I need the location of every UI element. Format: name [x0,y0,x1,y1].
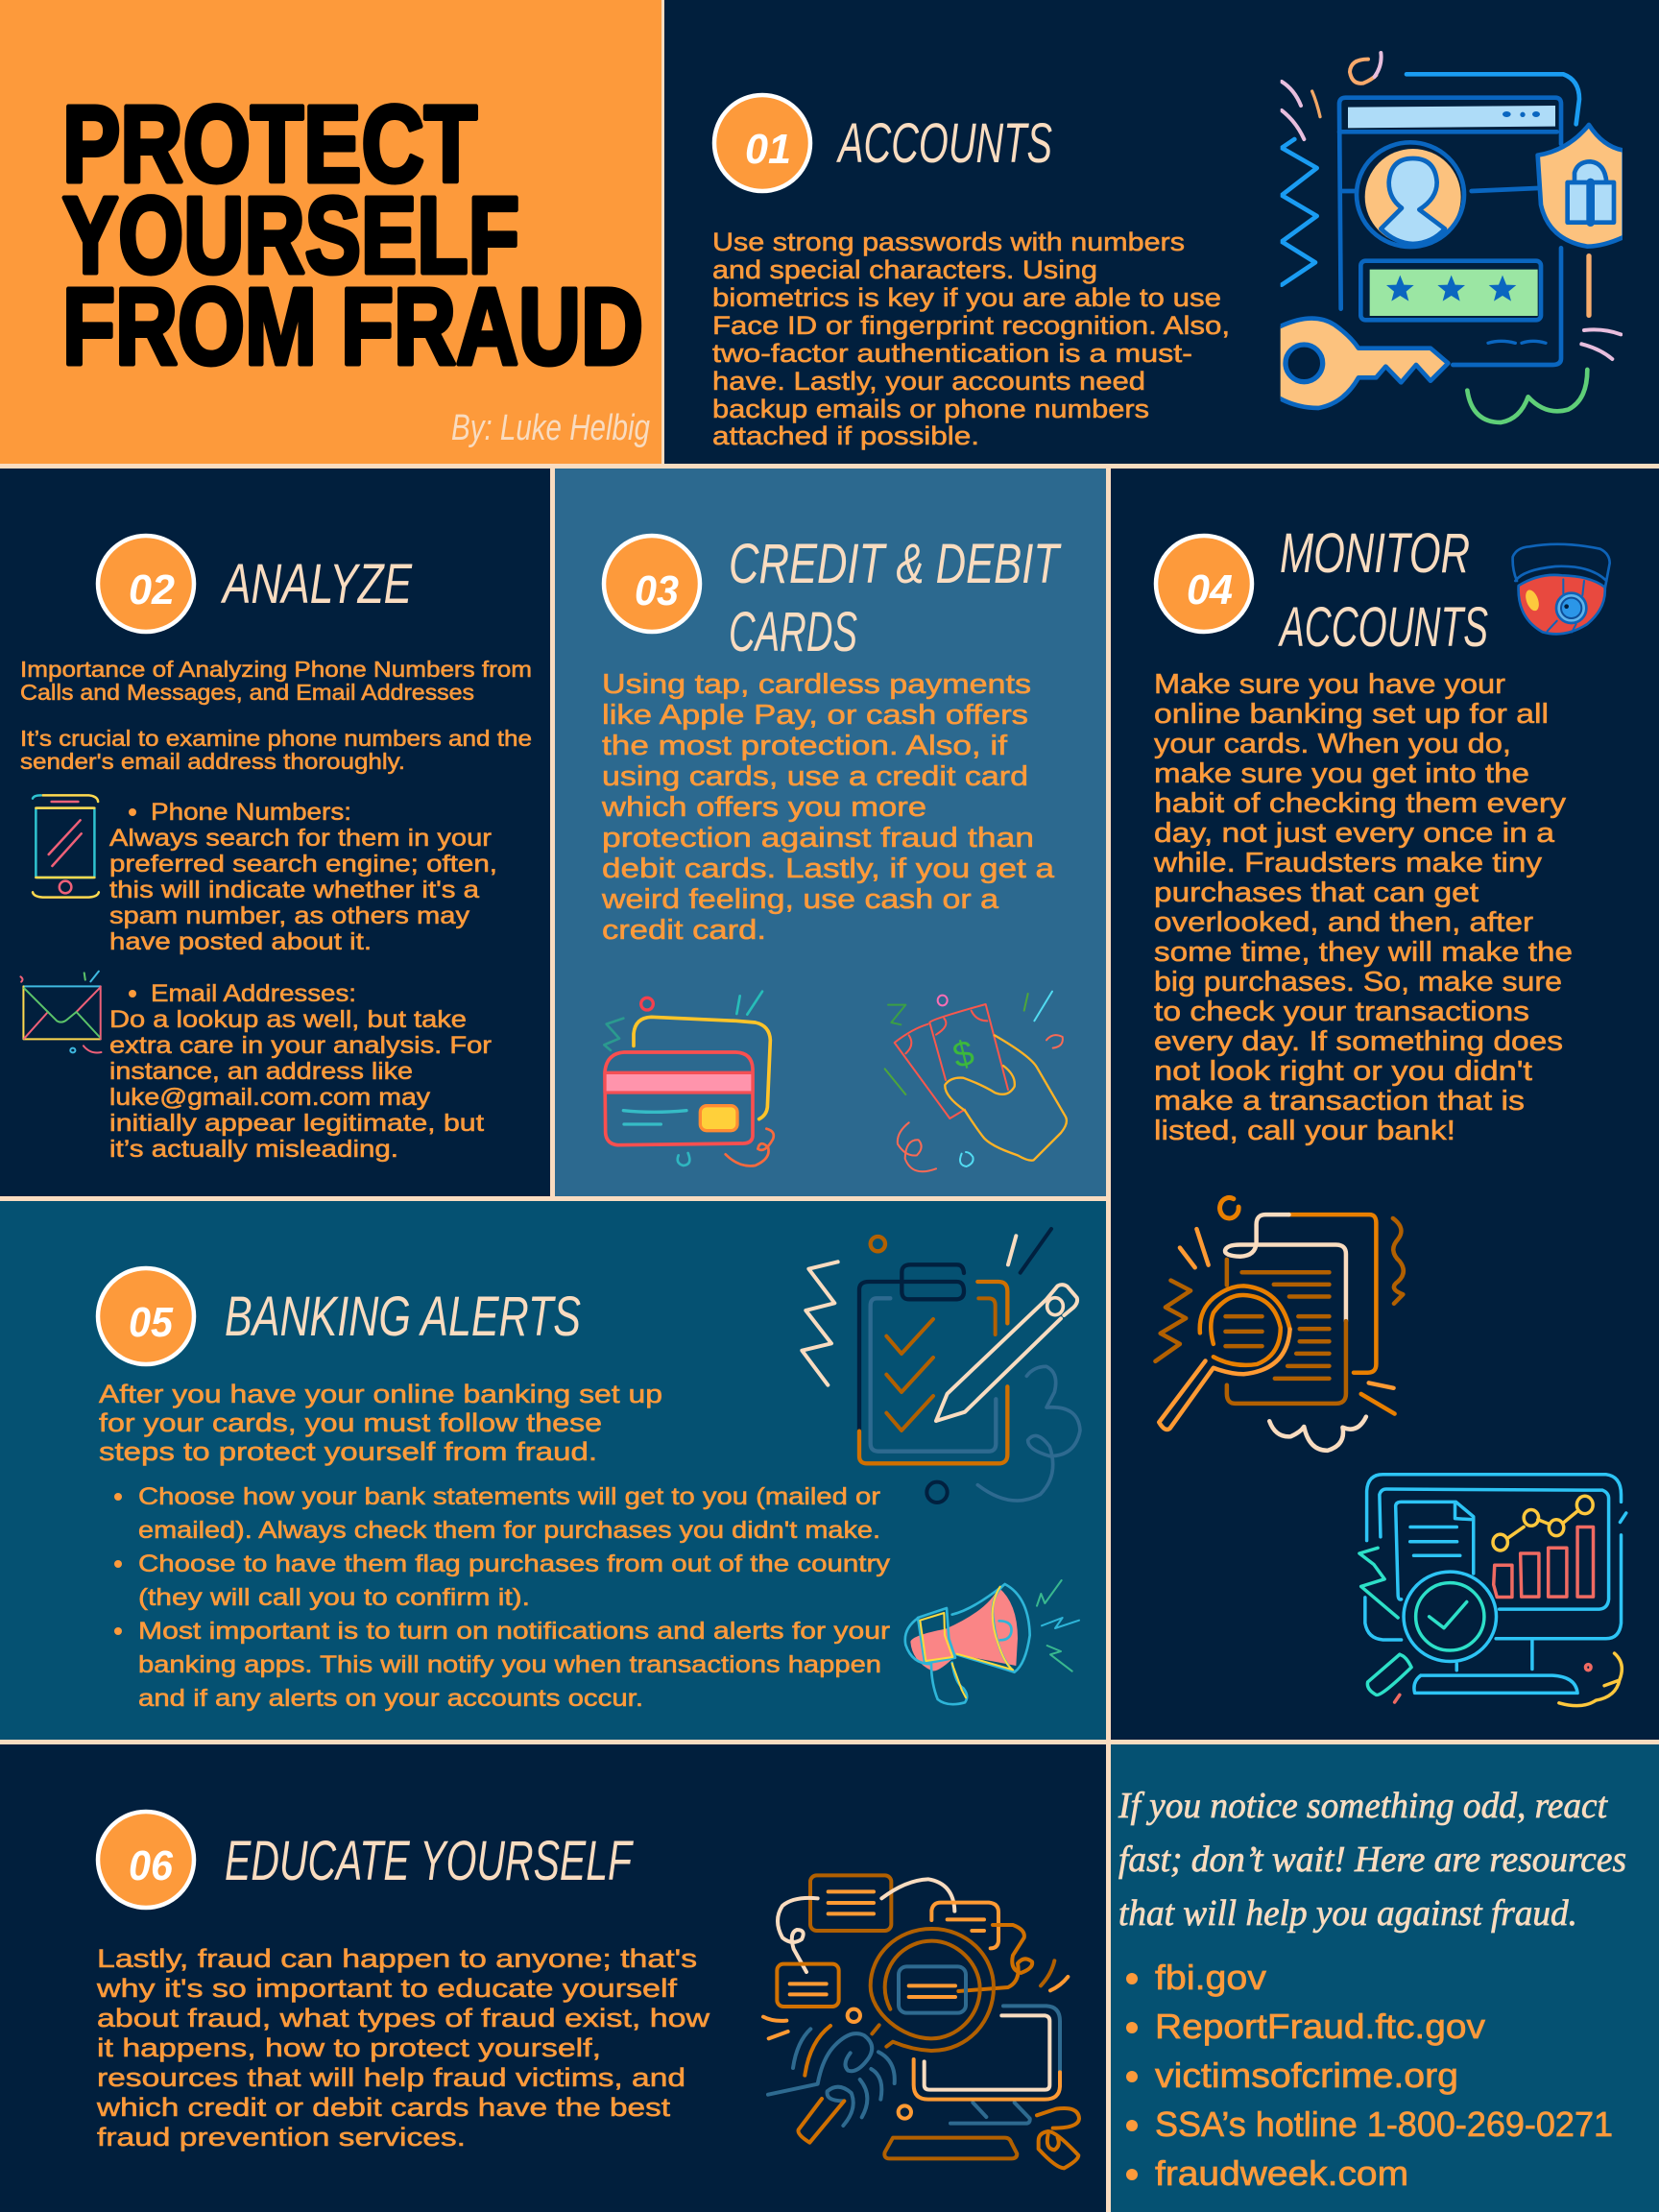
text block: monitor accounts: big purchases. So, make sure [1154,967,1562,998]
heading: credit and debit cards [729,533,1062,663]
text block: email addresses: Do a lookup as well, but take [109,1006,467,1033]
text block: monitor accounts: make sure you get into the [1154,758,1529,789]
list: fraud resources: ReportFraud.ftc.gov [1155,2007,1485,2046]
text block: cards: which offers you more [601,792,926,823]
text block: banking intro: steps to protect yourself from fraud. [99,1437,597,1466]
text block: banking intro: for your cards, you must follow these [99,1408,602,1437]
panel: 02 analyze [0,469,550,1196]
callout: react fast: If you notice something odd, react [1118,1786,1608,1826]
text block: accounts: attached if possible. [712,421,979,450]
title [62,84,643,387]
text block: monitor accounts: while. Fraudsters make tiny [1153,848,1543,878]
heading: monitor accounts [1278,522,1488,659]
text block: monitor accounts: make a transaction that is [1154,1086,1525,1117]
icon: security camera [1513,544,1610,634]
title: YOURSELF [62,175,519,296]
text block: monitor accounts: every day. If something does [1154,1026,1563,1057]
text block: monitor accounts: your cards. When you do, [1154,729,1511,759]
list: banking steps: banking apps. This will notify you when transactions happen [138,1651,881,1678]
panel: 05 banking alerts [0,1201,1106,1740]
text block: monitor accounts: Make sure you have your [1154,669,1505,700]
text block: email addresses: instance, an address like [109,1058,413,1085]
icon: envelope [20,972,101,1052]
heading: monitor accounts: ACCOUNTS [1278,596,1488,659]
text block: monitor accounts: overlooked, and then, after [1154,907,1533,938]
number badge 02: 02 [129,566,176,613]
text block: banking intro: After you have your online banking set up [99,1380,662,1408]
number badge 03: 03 [635,567,679,614]
list: fraud resources: SSA’s hotline 1-800-269-0271 [1155,2104,1613,2144]
text block: accounts: biometrics is key if you are able to use [712,283,1221,312]
panel: resources [1111,1744,1659,2212]
text block: monitor accounts: to check your transactions [1154,997,1529,1027]
text block: educate yourself: Lastly, fraud can happen to anyone; that's [97,1944,697,1973]
text block: monitor accounts [1153,669,1573,1146]
text block: cards [601,669,1055,946]
text block: phone numbers: this will indicate whether it's a [109,877,479,903]
text block: analyze intro: Calls and Messages, and Email Addresses [20,680,474,705]
icon: hand with cash: $ [949,1032,978,1075]
icon: phone [33,795,99,898]
text block: email addresses: extra care in your analysis. For [109,1032,492,1059]
number badge 04: 04 [1187,566,1233,613]
text block: accounts: Use strong passwords with numbers [712,228,1185,256]
list: banking steps: Most important is to turn on notifications and alerts for your [138,1618,890,1645]
text block: phone numbers [109,799,497,955]
title: FROM FRAUD [62,266,643,387]
icon: credit card [604,992,774,1166]
text block: email addresses: Email Addresses: [151,980,356,1007]
heading: credit and debit cards: CREDIT & DEBIT [729,533,1062,595]
icon: account security [1277,53,1624,422]
list: fraud resources: victimsofcrime.org [1155,2056,1458,2095]
text block: email addresses: it’s actually misleading. [109,1136,398,1163]
text block: cards: protection against fraud than [602,823,1034,854]
text block: cards: credit card. [602,915,766,946]
text block: educate yourself: about fraud, what types of fraud exist, how [97,2004,710,2032]
text block: educate yourself: which credit or debit cards have the best [96,2093,671,2122]
list: banking steps: Choose to have them flag purchases from out of the country [138,1551,891,1577]
number badge 04 [1156,536,1252,632]
icon: hand with cash [885,992,1067,1171]
number badge 01 [714,95,810,191]
text block: accounts: have. Lastly, your accounts need [712,367,1145,396]
text block: monitor accounts: some time, they will make the [1154,937,1573,968]
text block: monitor accounts: listed, call your bank! [1154,1116,1455,1146]
text block: educate yourself: it happens, how to protect yourself, [97,2033,601,2062]
number badge 05 [98,1268,194,1364]
list: banking steps [114,1483,891,1712]
number badge 06: 06 [129,1842,173,1889]
list: banking steps: and if any alerts on your accounts occur. [138,1685,643,1712]
icon: monitor with analytics [1359,1475,1626,1706]
panel: 03 credit and debit cards [555,469,1106,1196]
panel: 01 accounts [664,0,1659,464]
text block: email addresses [109,980,492,1163]
text block: monitor accounts: habit of checking them every [1154,788,1567,819]
text block: accounts [712,228,1230,450]
title: PROTECT [62,84,477,204]
panel: 04 monitor accounts [1111,469,1659,1740]
text block: cards: using cards, use a credit card [602,761,1028,792]
text block: cards: Using tap, cardless payments [602,669,1031,700]
text block: educate yourself: fraud prevention services. [97,2123,466,2152]
text block: monitor accounts: purchases that can get [1154,878,1479,908]
panel: title [0,0,661,464]
text block: email addresses: initially appear legitimate, but [109,1110,484,1137]
text block: accounts: Face ID or fingerprint recognition. Also, [712,311,1230,340]
byline: By: Luke Helbig [451,408,650,448]
callout: react fast [1118,1786,1626,1934]
text block: analyze intro: sender's email address thoroughly. [20,749,405,774]
text block: analyze intro: It’s crucial to examine phone numbers and the [20,726,532,751]
heading: analyze: ANALYZE [221,553,413,615]
text block: accounts: and special characters. Using [712,255,1097,284]
text block: banking intro [99,1380,662,1466]
list: banking steps: Choose how your bank statements will get to you (mailed or [138,1483,880,1510]
number badge 05: 05 [129,1299,173,1346]
text block: monitor accounts: not look right or you didn't [1154,1056,1532,1087]
text block: accounts: two-factor authentication is a must- [712,339,1192,368]
text block: phone numbers: have posted about it. [109,928,372,955]
heading: credit and debit cards: CARDS [729,601,857,663]
text block: phone numbers: spam number, as others may [109,902,470,929]
text block: cards: the most protection. Also, if [602,731,1008,761]
text block: phone numbers: preferred search engine; often, [109,851,497,878]
heading: banking alerts: BANKING ALERTS [225,1286,581,1348]
icon: document under magnifier [1155,1198,1404,1451]
text block: educate yourself [96,1944,710,2152]
list: fraud resources: fraudweek.com [1155,2153,1408,2193]
text block: cards: like Apple Pay, or cash offers [602,700,1028,731]
icon: clipboard and pencil [802,1229,1080,1503]
text block: email addresses: luke@gmail.com.com may [109,1084,431,1111]
text block: monitor accounts: day, not just every once in a [1154,818,1555,849]
text block: educate yourself: resources that will help fraud victims, and [97,2063,685,2092]
list: banking steps: emailed). Always check them for purchases you didn't make. [138,1517,880,1544]
panel: 06 educate yourself [0,1744,1106,2212]
list: fraud resources [1126,1958,1613,2193]
number badge 03 [604,536,700,632]
number badge 06 [98,1812,194,1908]
number badge 01: 01 [745,126,791,173]
list: banking steps: (they will call you to confirm it). [138,1584,530,1611]
list: fraud resources: fbi.gov [1155,1958,1266,1997]
text block: cards: debit cards. Lastly, if you get a [602,854,1055,884]
callout: react fast: fast; don’t wait! Here are resources [1118,1839,1626,1880]
icon: megaphone [905,1580,1079,1704]
text block: phone numbers: Phone Numbers: [151,799,351,826]
callout: react fast: that will help you against fraud. [1118,1893,1577,1934]
number badge 02 [98,536,194,632]
heading: educate yourself: EDUCATE YOURSELF [225,1830,635,1892]
heading: accounts: ACCOUNTS [836,112,1052,175]
icon: fingerprint and computer [763,1875,1079,2168]
text block: phone numbers: Always search for them in your [109,825,492,852]
text block: analyze intro [20,657,532,774]
text block: analyze intro: Importance of Analyzing Phone Numbers from [20,657,532,682]
text block: cards: weird feeling, use cash or a [601,884,999,915]
text block: monitor accounts: online banking set up for all [1154,699,1549,730]
text block: educate yourself: why it's so important to educate yourself [96,1974,678,2003]
text block: accounts: backup emails or phone numbers [712,395,1149,423]
heading: monitor accounts: MONITOR [1280,522,1470,585]
